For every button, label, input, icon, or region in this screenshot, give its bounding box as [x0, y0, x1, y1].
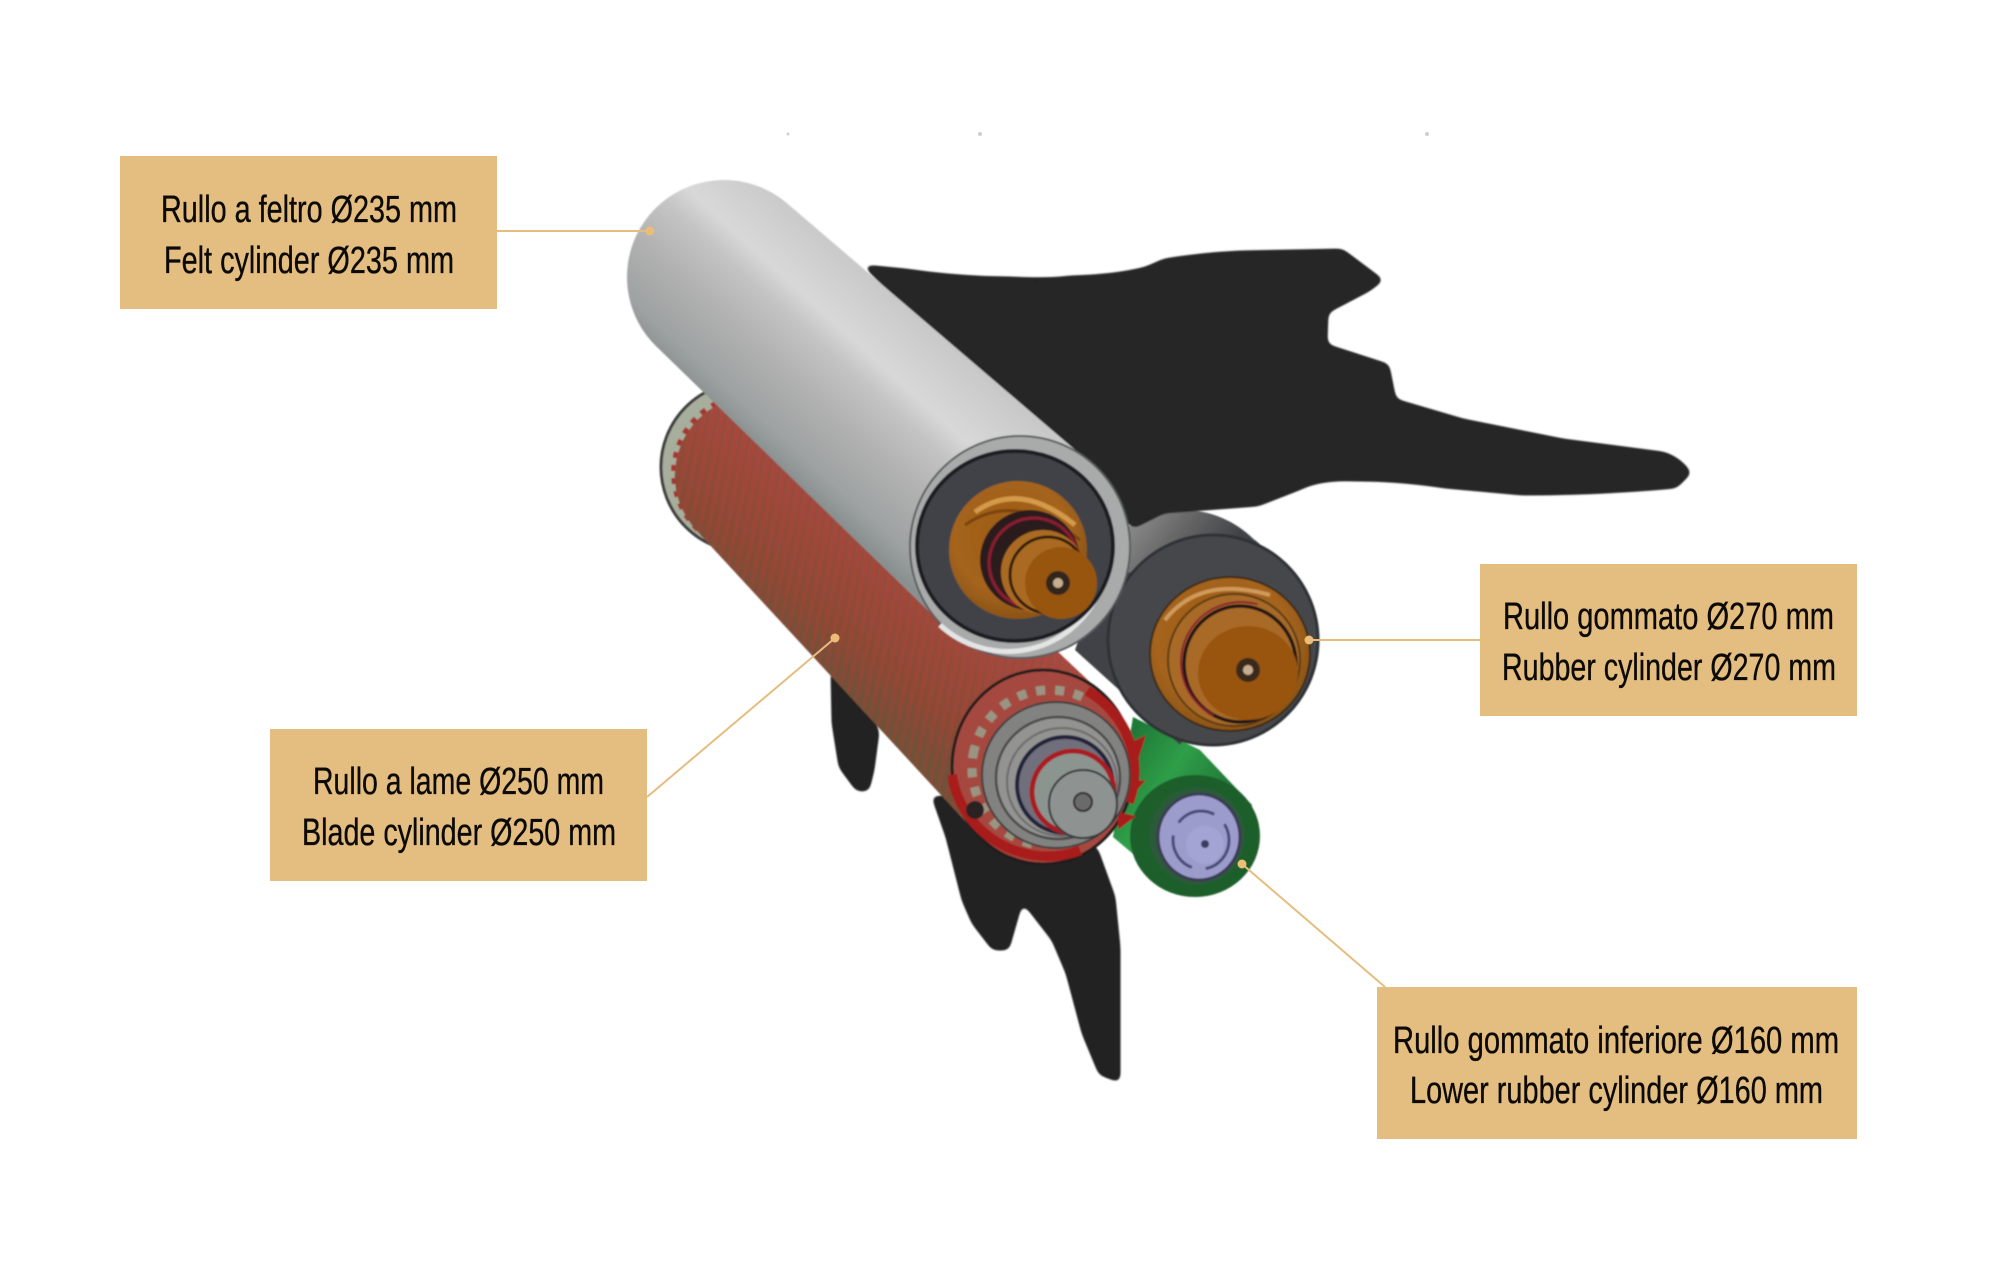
- leader line: rubber cylinder: [1304, 636, 1480, 644]
- faint specks at top: [786, 132, 1429, 136]
- label: felt cylinder: Felt cylinder Ø235 mm: [164, 240, 454, 282]
- leader line: felt cylinder: [497, 226, 654, 236]
- felt cylinder body: [627, 180, 1094, 628]
- leather hide lower part: [832, 670, 1119, 1081]
- rubber cylinder body: [1075, 510, 1290, 745]
- label: lower rubber cylinder: Lower rubber cylinder Ø160 mm: [1410, 1070, 1823, 1112]
- label: rubber cylinder: Rullo gommato Ø270 mm: [1503, 596, 1834, 638]
- red blades teeth: [1118, 735, 1146, 830]
- rubber shaft brass: [1150, 577, 1318, 739]
- blade cylinder end face: [918, 644, 1168, 890]
- machine illustration: [627, 180, 1690, 1081]
- label: rubber cylinder: [1480, 564, 1857, 716]
- felt shaft brass: [949, 481, 1097, 619]
- rubber cylinder end face: [1107, 534, 1319, 746]
- label: blade cylinder: Blade cylinder Ø250 mm: [302, 812, 616, 854]
- blade shaft: [982, 702, 1130, 848]
- label: blade cylinder: [270, 729, 647, 881]
- label: rubber cylinder: Rubber cylinder Ø270 mm: [1502, 647, 1836, 689]
- label: lower rubber cylinder: Rullo gommato inferiore Ø160 mm: [1393, 1020, 1839, 1062]
- leader line: blade cylinder: [647, 634, 840, 797]
- blade bolt: [966, 801, 984, 819]
- lower shaft: [1158, 794, 1240, 880]
- label: blade cylinder: Rullo a lame Ø250 mm: [313, 761, 604, 803]
- label: felt cylinder: Rullo a feltro Ø235 mm: [161, 189, 457, 231]
- felt cylinder end face: [910, 436, 1130, 658]
- leather hide upper part: [865, 250, 1690, 527]
- lower rubber cylinder body: [1113, 717, 1252, 885]
- label: lower rubber cylinder: [1377, 987, 1857, 1139]
- leader line: lower rubber cylinder: [1238, 860, 1385, 987]
- lower rubber cylinder end face: [1130, 775, 1260, 897]
- blade cylinder body: [661, 382, 1109, 834]
- label: felt cylinder: [120, 156, 497, 309]
